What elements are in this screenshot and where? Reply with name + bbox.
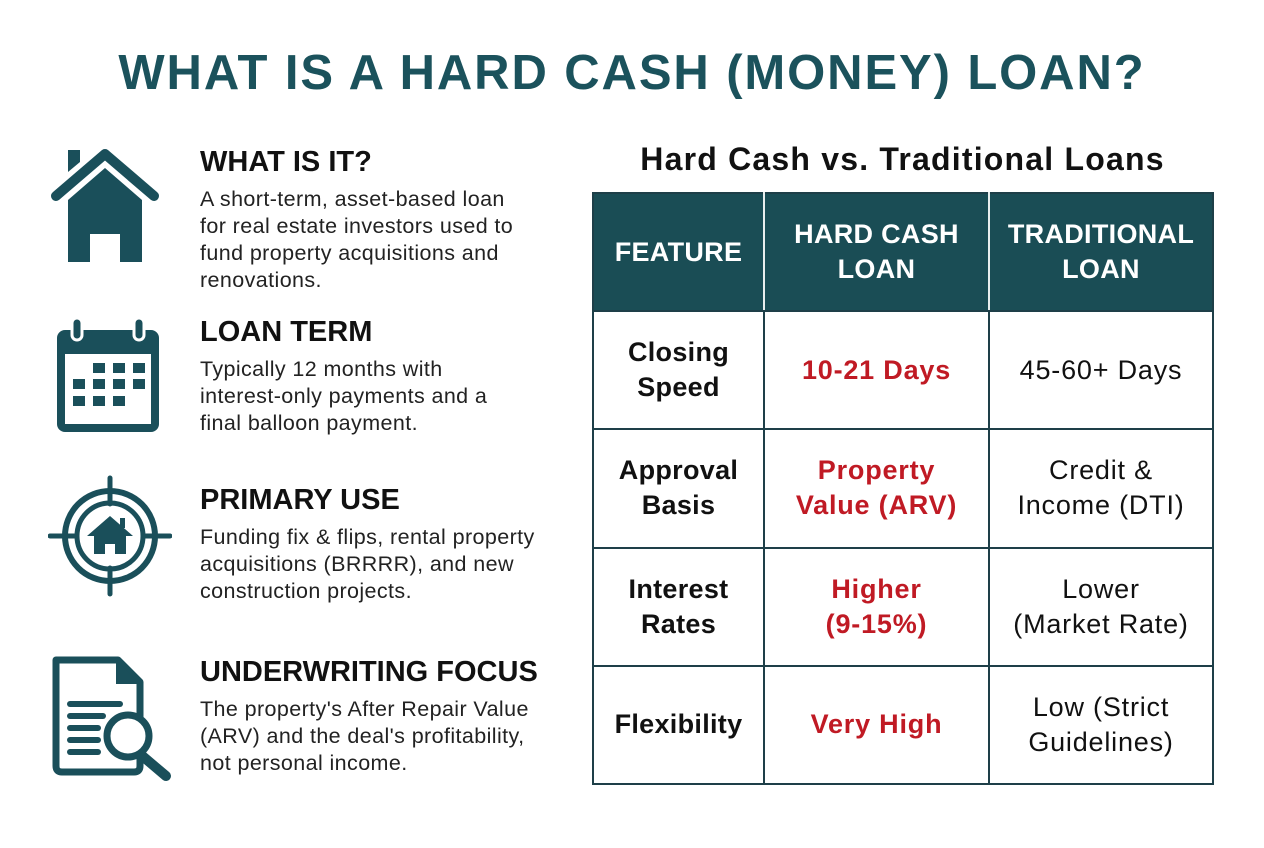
comparison table: Credit & bbox=[1049, 455, 1153, 485]
comparison table: LOAN bbox=[838, 254, 915, 284]
item: loan term bbox=[57, 316, 487, 435]
comparison table: Very High bbox=[811, 709, 942, 739]
icon: house bbox=[51, 149, 159, 262]
item: underwriting focus bbox=[52, 656, 538, 781]
item: primary use: construction projects. bbox=[200, 579, 412, 603]
comparison table: Property bbox=[818, 455, 935, 485]
comparison table: Value (ARV) bbox=[796, 490, 957, 520]
item: underwriting focus: not personal income. bbox=[200, 751, 408, 775]
comparison table: LOAN bbox=[1062, 254, 1140, 284]
item: what is it: fund property acquisitions and bbox=[200, 241, 499, 265]
comparison table: Rates bbox=[641, 609, 716, 639]
item: what is it bbox=[51, 146, 513, 292]
item: what is it: renovations. bbox=[200, 268, 322, 292]
comparison table: 10-21 Days bbox=[802, 355, 951, 385]
comparison table: (9-15%) bbox=[826, 609, 927, 639]
comparison table bbox=[592, 192, 1214, 785]
item: primary use: Funding fix & flips, rental property bbox=[200, 525, 535, 549]
icon: calendar bbox=[57, 320, 159, 432]
item: loan term: final balloon payment. bbox=[200, 411, 418, 435]
item: what is it: WHAT IS IT? bbox=[200, 146, 372, 178]
item: loan term: interest-only payments and a bbox=[200, 384, 487, 408]
comparison table: Flexibility bbox=[615, 709, 742, 739]
comparison table: Higher bbox=[831, 574, 922, 604]
item: loan term: Typically 12 months with bbox=[200, 357, 443, 381]
item: what is it: for real estate investors used to bbox=[200, 214, 513, 238]
comparison table: (Market Rate) bbox=[1013, 609, 1189, 639]
item: loan term: LOAN TERM bbox=[200, 316, 372, 348]
comparison table: Speed bbox=[637, 372, 720, 402]
comparison table: TRADITIONAL bbox=[1008, 219, 1194, 249]
comparison table: Low (Strict bbox=[1033, 692, 1169, 722]
item: underwriting focus: The property's After Repair Value bbox=[200, 697, 529, 721]
item: primary use bbox=[48, 476, 535, 603]
comparison table: Approval bbox=[619, 455, 738, 485]
comparison table: Income (DTI) bbox=[1017, 490, 1185, 520]
comparison table: Interest bbox=[629, 574, 728, 604]
comparison table: FEATURE bbox=[615, 237, 742, 267]
comparison table: Lower bbox=[1062, 574, 1140, 604]
comparison table: 45-60+ Days bbox=[1020, 355, 1182, 385]
comparison table: Closing bbox=[628, 337, 729, 367]
table subtitle: Hard Cash vs. Traditional Loans bbox=[640, 141, 1165, 177]
comparison table: Basis bbox=[642, 490, 715, 520]
comparison table: Guidelines) bbox=[1028, 727, 1174, 757]
item: primary use: PRIMARY USE bbox=[200, 484, 400, 516]
item: what is it: A short-term, asset-based loan bbox=[200, 187, 505, 211]
item: primary use: acquisitions (BRRRR), and new bbox=[200, 552, 514, 576]
title: WHAT IS A HARD CASH (MONEY) LOAN? bbox=[118, 46, 1146, 100]
item: underwriting focus: UNDERWRITING FOCUS bbox=[200, 656, 538, 688]
icon: document magnifier bbox=[52, 656, 171, 781]
item: underwriting focus: (ARV) and the deal's profitability, bbox=[200, 724, 524, 748]
comparison table: HARD CASH bbox=[794, 219, 959, 249]
icon: target house bbox=[48, 476, 172, 596]
